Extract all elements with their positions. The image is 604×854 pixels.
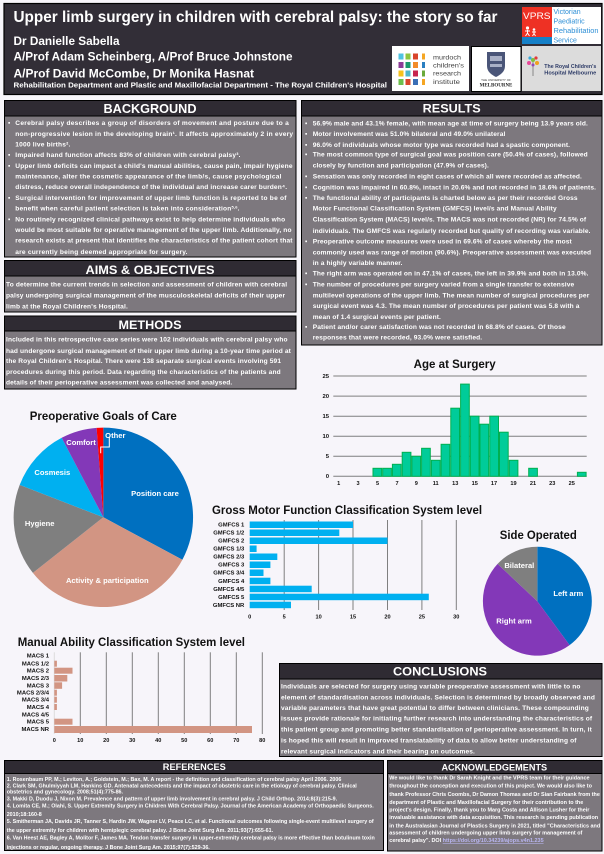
logo: Murdoch Children's Research Institute: children's — [433, 62, 465, 70]
text: acknowledgements: invaluable assistance with data acquisition. This research is pending publication — [389, 815, 598, 821]
text: references: injections or regular, ongoing therapy. J Bone Joint Surg Am. 2015;97(7):529-36. — [7, 845, 210, 851]
text: conclusions: this patient group and promoting better standardisation of perioperative assessment. In turn, it — [281, 726, 593, 733]
chart: manual ability classification bars: MACS 2 — [27, 669, 50, 675]
text: results bullets: The most common type of surgical goal was position care (50.4% of cases), followed — [313, 152, 588, 159]
header banner — [4, 4, 602, 94]
chart: manual ability classification bars — [17, 637, 265, 744]
text: background bullets: 1000 live births². — [15, 141, 71, 148]
logo: Murdoch Children's Research Institute — [392, 46, 469, 91]
text: background bullets: ▪ — [8, 120, 11, 127]
text: references: 5. Smitherman JA, Davids JR, Tanner S, Hardin JW, Wagner LV, Peace LC, et al. Functional outcomes following single-event multilevel surgery of — [7, 819, 374, 825]
chart: manual ability classification bars: MACS 5 — [27, 720, 50, 726]
text: background bullets: maintenance, alter the cosmetic appearance of the limb/s, cause psychological — [15, 173, 282, 180]
chart: age at surgery histogram: 11 — [433, 481, 439, 487]
text: acknowledgements: assessment of children undergoing upper limb surgery for management of — [389, 830, 583, 836]
heading: conclusions: CONCLUSIONS — [393, 664, 487, 678]
chart: manual ability classification bars: MACS NR — [22, 727, 50, 733]
chart: gross motor function classification bars: 10 — [315, 615, 322, 621]
text: results bullets: ▪ — [305, 131, 307, 138]
chart: gross motor function classification bars: 20 — [384, 615, 391, 621]
text: results bullets: multilevel operations of the upper limb. The mean number of surgical procedures per — [313, 292, 590, 299]
text: background bullets: distress, reduce overall independence of the individual and increase carer burden⁴. — [15, 184, 287, 191]
logo: Victorian Paediatric Rehabilitation Service: Victorian — [554, 9, 581, 16]
chart: manual ability classification bars: MACS 4 — [27, 705, 50, 711]
text: results bullets: ▪ — [305, 142, 307, 149]
chart: age at surgery histogram: 19 — [510, 481, 517, 487]
logo: Murdoch Children's Research Institute: institute — [433, 79, 460, 86]
chart: gross motor function classification bars: 15 — [350, 615, 356, 621]
chart: manual ability classification bars: MACS 4/5 — [22, 712, 50, 718]
text: results bullets: in a highly variable manner. — [313, 260, 403, 267]
chart: age at surgery histogram: 1 — [337, 481, 340, 487]
chart: preoperative goals of care pie: Cosmesis — [34, 468, 70, 477]
text: acknowledgements: thank Professor Chris Coombs, Dr Damon Thomas and Dr Sian Fairbank from the — [389, 792, 600, 798]
heading: aims and objectives: AIMS & OBJECTIVES — [86, 263, 214, 277]
logo: Royal Children's Hospital Melbourne: Hospital Melbourne — [544, 70, 597, 76]
chart: gross motor function classification bars: GMFCS 2 — [218, 539, 245, 545]
chart: gross motor function classification bars: GMFCS 1/3 — [213, 547, 245, 553]
text: methods: Included in this retrospective case series were 102 individuals with cerebral palsy who — [6, 336, 288, 343]
text: acknowledgements: We would like to thank Dr Sarah Knight and the VPRS team for their guidance — [389, 776, 590, 782]
chart: manual ability classification bars: MACS 1 — [27, 654, 50, 660]
text: background bullets: Impaired hand function affects 83% of children with cerebral palsy³. — [15, 152, 241, 159]
text: background bullets: non-progressive lesion in the developing brain¹. It affects approximately 2 in every — [15, 131, 293, 138]
chart title: age at surgery: Age at Surgery — [414, 359, 496, 371]
text: background bullets: No routinely recognized clinical pathways exist to help determine individuals who — [15, 217, 285, 224]
logo: University of Melbourne — [472, 46, 521, 92]
text: references: 2. Clark SM, Ghulmiyyah LM, Hankins GD. Antenatal antecedents and the impact of obstetric care in the etiology of cerebral palsy. Clinical — [7, 784, 357, 790]
text: background bullets: Upper limb deficits can impact a child's manual abilities, cause pain, impair hygiene — [15, 163, 293, 170]
chart title: preoperative goals: Preoperative Goals of Care — [30, 411, 177, 423]
chart: gross motor function classification bars: GMFCS 2/3 — [213, 555, 245, 561]
affiliation: Rehabilitation Department and Plastic and Maxillofacial Department - The Royal Children's Hospital — [14, 82, 387, 90]
text: acknowledgements: throughout the conception and execution of this project. We would also like to — [389, 784, 593, 790]
chart: manual ability classification bars: MACS 2/3/4 — [17, 691, 50, 697]
chart: age at surgery histogram: 7 — [395, 481, 399, 487]
chart: preoperative goals of care pie: Other — [105, 431, 125, 440]
chart: preoperative goals of care pie: Activity & participation — [66, 576, 149, 585]
text: acknowledgements: department of Plastic and Maxillofacial Surgery for their contribution to the — [389, 800, 583, 806]
text: results bullets: Sensation was only recorded in eight cases of which all were recorded as affected. — [313, 173, 582, 180]
chart: manual ability classification bars: MACS 2/3 — [22, 676, 50, 682]
text: background bullets: . — [238, 206, 240, 213]
chart: gross motor function classification bars: 0 — [248, 615, 251, 621]
text: results bullets: The number of procedures per surgery varied from a single transfer to extensive — [313, 281, 574, 288]
panel: conclusions — [280, 664, 602, 756]
chart: age at surgery histogram: 15 — [472, 481, 478, 487]
text: results bullets: surgical event was 4.3. The mean number of procedures per patient was 5.8 with a — [313, 303, 580, 310]
logo: Murdoch Children's Research Institute: research — [433, 70, 461, 78]
panel: aims and objectives — [4, 260, 296, 312]
text: background bullets: ▪ — [8, 163, 11, 170]
text: acknowledgements: cerebral palsy". DOI https://doi.org/10.34239/ajops.v4n1.235 — [389, 838, 544, 844]
chart: gross motor function classification bars: GMFCS 4 — [218, 579, 245, 585]
chart: manual ability classification bars: MACS 3/4 — [22, 698, 50, 704]
text: conclusions: element of standardisation across individuals. Selection is determined by broadly observed and — [281, 694, 595, 701]
text: results bullets: 56.9% male and 43.1% female, with mean age at time of surgery being 13.9 years old. — [313, 121, 588, 128]
authors: A/Prof David McCombe, Dr Monika Hasnat — [14, 68, 254, 80]
text: results bullets: ▪ — [305, 184, 307, 191]
text: results bullets: ▪ — [305, 152, 307, 159]
text: conclusions: issues provide rationale for initiating further research into understanding the characteristics of — [281, 716, 593, 723]
chart: manual ability classification bars: 10 — [77, 738, 83, 744]
text: results bullets: ▪ — [305, 324, 307, 331]
text: methods: the Royal Children's Hospital. There were 138 separate surgical events involving 591 — [6, 358, 281, 365]
chart: age at surgery histogram: 10 — [322, 434, 330, 440]
panel: methods — [4, 316, 296, 389]
panel: results — [302, 100, 602, 345]
heading: methods: METHODS — [118, 318, 182, 332]
text: conclusions: Individuals are selected for surgery using variable preoperative assessment with little to no — [281, 683, 581, 690]
chart: side operated pie: Right arm — [496, 616, 532, 626]
text: references — [7, 777, 375, 851]
chart: preoperative goals of care pie — [14, 411, 193, 607]
chart: side operated pie: Left arm — [553, 589, 584, 598]
text: aims — [6, 281, 287, 310]
text: references: 3. Makki D, Duodu J, Nixon M. Prevalence and pattern of upper limb involvement in cerebral palsy. J Child Orthop. 2014;8(3):215-9. — [7, 796, 338, 802]
text: results bullets: Motor involvement was 51.0% bilateral and 49.0% unilateral — [313, 131, 505, 138]
chart: age at surgery histogram: 20 — [322, 394, 330, 400]
text: background bullets: Surgical intervention for improvement of upper limb function is reported to be of — [15, 195, 287, 202]
text: acknowledgements: in the Australasian Journal of Plastics Surgery in 2021, titled "Characteristics and — [389, 823, 600, 829]
text: references: 6. Van Heest AE, Bagley A, Molitor F, James MA. Tendon transfer surgery in upper-extremity cerebral palsy is more effective than botulinum toxin — [7, 836, 375, 842]
logo: Victorian Paediatric Rehabilitation Service: Service — [554, 38, 577, 44]
text: methods: details of their perioperative assessment was collected and analysed. — [6, 380, 232, 387]
chart: gross motor function classification bars: GMFCS 1/2 — [213, 531, 245, 537]
logo: Royal Children's Hospital Melbourne: The Royal Children's — [544, 64, 597, 70]
text: background bullets: ▪ — [8, 152, 11, 159]
chart: age at surgery histogram: 15 — [322, 414, 330, 420]
text: results bullets: Cognition was impaired in 60.8%, intact in 20.6% and not recorded in 18.6% of patients. — [313, 184, 596, 191]
chart: preoperative goals of care pie: Position care — [131, 489, 179, 498]
text: results bullets: ▪ — [305, 195, 307, 202]
chart title: side operated: Side Operated — [500, 530, 577, 542]
text: methods: procedures during this period. Data regarding the characteristics of the patients and — [6, 369, 281, 376]
chart: gross motor function classification bars: GMFCS NR — [213, 603, 245, 609]
chart: age at surgery histogram: 5 — [326, 454, 330, 460]
authors — [14, 36, 292, 80]
chart: age at surgery histogram: 21 — [530, 481, 536, 487]
text: results bullets: Preoperative outcome measures were used in 69.6% of cases whereby the most — [313, 239, 573, 246]
panel: acknowledgements — [388, 760, 602, 851]
text: methods — [6, 336, 292, 387]
text: acknowledgements — [389, 776, 600, 844]
chart: age at surgery histogram: 13 — [452, 481, 458, 487]
chart: manual ability classification bars: 60 — [207, 738, 213, 744]
text: results bullets: commonly used was range of motion (90.6%). Preoperative assessment was executed — [313, 249, 591, 256]
text: background bullets: are currently being deemed appropriate for surgery. — [15, 249, 188, 256]
text: aims: limb at the Royal Children's Hospital. — [6, 303, 128, 310]
title: Upper limb surgery in children with cerebral palsy: the story so far — [14, 9, 498, 26]
text: results bullets: responses that were recorded, 93.0% were satisfied. — [313, 335, 482, 342]
logo: Royal Children's Hospital Melbourne — [522, 46, 601, 91]
chart: manual ability classification bars: 0 — [53, 738, 56, 744]
heading: background: BACKGROUND — [104, 102, 196, 116]
text: results bullets: ▪ — [305, 121, 307, 128]
chart: gross motor function classification bars: 30 — [453, 615, 459, 621]
text: results bullets: The functional ability of participants is charted below as per their recorded Gross — [313, 195, 578, 202]
chart title: GMFCS: Gross Motor Function Classification System level — [212, 505, 482, 517]
logo: University of Melbourne: MELBOURNE — [480, 84, 513, 88]
text: results bullets: The right arm was operated on in 47.1% of cases, the left in 39.9% and both in 13.0%. — [313, 271, 589, 278]
chart: age at surgery histogram: 23 — [549, 481, 555, 487]
text: references: 2010;18:160-8 — [7, 812, 42, 818]
logo: Victorian Paediatric Rehabilitation Service — [522, 7, 601, 44]
text: results bullets: 96.0% of individuals whose motor type was recorded had a spastic component. — [313, 142, 570, 149]
chart: manual ability classification bars: 40 — [155, 738, 161, 744]
text: results bullets: ▪ — [305, 271, 307, 278]
chart: gross motor function classification bars: 5 — [283, 615, 286, 621]
chart: manual ability classification bars: 80 — [259, 738, 265, 744]
chart: preoperative goals of care pie: Hygiene — [25, 519, 54, 528]
text: results bullets: Patient and/or carer satisfaction was not recorded in 68.8% of cases. Of those — [313, 324, 566, 331]
chart: gross motor function classification bars: GMFCS 3/4 — [213, 571, 245, 577]
heading: references: REFERENCES — [163, 762, 226, 773]
text: results bullets: individuals. The GMFCS was regularly recorded but quality of recording was variable. — [313, 228, 591, 235]
chart: manual ability classification bars: 50 — [181, 738, 187, 744]
chart: gross motor function classification bars: GMFCS 4/5 — [213, 587, 245, 593]
text: background bullets: would be most suitable for operative management of the upper limb. Additionally, no — [14, 227, 292, 234]
chart: age at surgery histogram — [322, 359, 587, 487]
text: background bullets: research exists at present that identifies the characteristics of the patient cohort that — [15, 238, 293, 245]
panel: background — [4, 100, 296, 257]
text: results bullets: mean of 1.4 surgical events per patient. — [313, 314, 441, 321]
text: background bullets: ▪ — [8, 217, 11, 224]
chart: age at surgery histogram: 5 — [376, 481, 379, 487]
chart: age at surgery histogram: 25 — [322, 374, 330, 380]
chart: side operated pie: Bilateral — [504, 561, 534, 570]
chart: gross motor function classification bars: GMFCS 3 — [218, 563, 245, 569]
text: results bullets — [305, 121, 596, 342]
chart: manual ability classification bars: 30 — [129, 738, 135, 744]
text: results bullets: closely by function and participation (47.9% of cases). — [313, 163, 489, 170]
chart: gross motor function classification bars — [212, 505, 482, 621]
chart: gross motor function classification bars: GMFCS 5 — [218, 595, 245, 601]
authors: Dr Danielle Sabella — [14, 36, 120, 48]
logo: Murdoch Children's Research Institute: murdoch — [433, 54, 461, 62]
heading: acknowledgements: ACKNOWLEDGEMENTS — [441, 762, 547, 773]
chart: manual ability classification bars: 70 — [233, 738, 239, 744]
text: conclusions — [281, 683, 595, 755]
text: references: obstetrics and gynecology. 2008;51(4):775-86. — [7, 790, 124, 796]
chart: age at surgery histogram: 17 — [491, 481, 497, 487]
chart title: MACS: Manual Ability Classification System level — [18, 637, 245, 649]
text: conclusions: variable parameters that have great potential to differ between clinicians. These compounding — [281, 705, 589, 712]
text: references: 1. Rosenbaum PP, M.; Leviton, A.; Goldstein, M.; Bax, M. A report - the definition and classification of cerebral palsy April 2006. 2006 — [7, 777, 341, 783]
text: aims: palsy undergoing surgical management of the musculoskeletal deficits of their upper — [6, 292, 285, 299]
text: results bullets: ▪ — [305, 173, 307, 180]
text: results bullets: Classification System (MACS) level/s. The MACS was not recorded (NR) for 74.5% of — [313, 216, 587, 223]
logo: Victorian Paediatric Rehabilitation Service: Rehabilitation — [554, 28, 599, 35]
chart: age at surgery histogram: 0 — [326, 474, 330, 480]
text: results bullets: ▪ — [305, 239, 307, 246]
text: background bullets — [8, 120, 293, 256]
logo: Victorian Paediatric Rehabilitation Service: Paediatric — [554, 18, 585, 26]
text: conclusions: relevant surgical indicators and their bearing on outcomes. — [281, 748, 475, 755]
chart: side operated pie — [483, 530, 592, 656]
panel: references — [4, 760, 384, 851]
chart: gross motor function classification bars: GMFCS 1 — [218, 523, 245, 529]
chart: manual ability classification bars: MACS 3 — [27, 683, 50, 689]
text: aims: To determine the current trends in selection and assessment of children with cerebral — [6, 281, 287, 288]
chart: age at surgery histogram: 9 — [415, 481, 418, 487]
text: methods: had undergone surgical management of their upper limb during a 10-year time period at — [6, 348, 292, 355]
text: references: 4. Lomita CE, M.; Olahi, S. Upper Extremity Surgery in Children With Cerebral Palsy. Journal of the American Academy of Orthopaedic Surgeons. — [7, 804, 374, 810]
text: background bullets: ▪ — [8, 195, 11, 202]
text: background bullets: Cerebral palsy describes a group of disorders of movement and posture due to a — [15, 120, 289, 127]
text: background bullets: benefit when careful patient selection is taken into consideration — [15, 206, 231, 213]
chart: age at surgery histogram: 25 — [569, 481, 575, 487]
chart: gross motor function classification bars: 25 — [419, 615, 425, 621]
logo: University of Melbourne: THE UNIVERSITY OF — [481, 78, 511, 82]
text: results bullets: ▪ — [305, 281, 307, 288]
chart: manual ability classification bars: MACS 1/2 — [22, 662, 50, 668]
chart: manual ability classification bars: 20 — [103, 738, 109, 744]
heading: results: RESULTS — [423, 102, 481, 116]
chart: age at surgery histogram: 3 — [356, 481, 360, 487]
text: conclusions: is hoped this will result in improved translatability of data to allow better understanding of — [281, 737, 577, 744]
text: background bullets: 5,6 — [231, 205, 238, 210]
text: acknowledgements: project's design. Finally, thank you to Marg Costa and Allison Lusher for their — [389, 808, 590, 814]
chart: preoperative goals of care pie: Comfort — [66, 438, 96, 447]
text: references: the upper extremity for children with hemiplegic cerebral palsy. J Bone Joint Surg Am. 2011;93(7):655-61. — [7, 828, 274, 834]
text: results bullets: Motor Functional Classification System (GMFCS) level/s and Manual Ability — [313, 206, 557, 213]
logo: Victorian Paediatric Rehabilitation Service: VPRS — [523, 11, 550, 21]
authors: A/Prof Adam Scheinberg, A/Prof Bruce Johnstone — [14, 52, 292, 64]
